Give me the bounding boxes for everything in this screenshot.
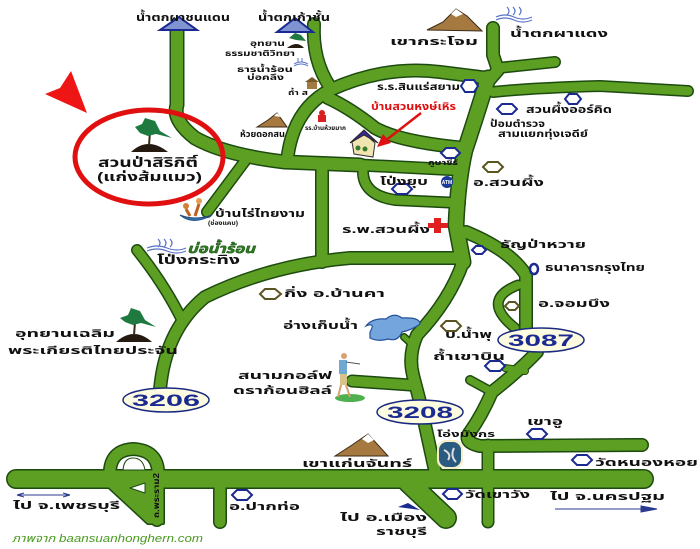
direction arrow Ratchaburi [398, 503, 420, 510]
bank marker [530, 264, 538, 274]
direction arrow Nakhon Pathom [555, 506, 657, 512]
place labels: สนามกอล์ฟ [238, 370, 332, 382]
ATM marker: ATM [442, 180, 452, 186]
place labels: ป้อมตำรวจ [490, 118, 545, 130]
place labels: บ้านไร่ไทยงาม [215, 207, 305, 220]
icon: waves hot spring [294, 58, 308, 66]
place labels: ดราก้อนฮิลล์ [233, 384, 332, 397]
place labels: ภูษาชีร์ [428, 159, 459, 167]
place labels: อุทยาน [250, 39, 285, 48]
route badge 3208: 3208 [387, 403, 453, 422]
place labels: ธนาคารกรุงไทย [545, 262, 645, 274]
icon: house [350, 130, 378, 157]
place labels: ราชบุรี [376, 526, 428, 538]
icon: waves north [496, 7, 532, 22]
place labels: บ้านสวนหงษ์เหิร [371, 100, 456, 113]
olive hexagon markers [260, 162, 519, 331]
route badge 3206: 3206 [132, 391, 200, 410]
place labels: น้ำตกผาแดง [510, 25, 608, 40]
icon: hospital cross [428, 218, 448, 233]
place labels: บ.น้ำพุ [445, 326, 492, 341]
place labels: อุทยานเฉลิม [15, 328, 115, 340]
place labels: เขาแก่นจันทร์ [302, 457, 413, 470]
place labels: รร.บ้านห้วยมาก [305, 125, 346, 132]
icon: shrine [305, 77, 319, 89]
route badge 3208 [377, 400, 463, 424]
icon: mountain west [257, 113, 287, 127]
place labels: น้ำตกผาชนแดน [136, 9, 230, 24]
place labels: โอ่งมังกร [437, 428, 496, 439]
icon: tree [131, 118, 172, 152]
place labels: ไป จ.เพชรบุรี [13, 500, 121, 512]
place labels: ถ้ำเขาบิน [433, 348, 505, 363]
place labels: (ช่องแคบ) [208, 219, 238, 227]
place labels: น้ำตกเก้าชั้น [258, 9, 330, 24]
place labels: สวนผึ้งออร์คิด [526, 101, 612, 116]
icon: mountain north [427, 9, 482, 31]
icon: tree lower [116, 308, 156, 342]
icon: boat rafting [180, 198, 212, 220]
place labels: ธัญป่าหวาย [500, 238, 586, 251]
place labels: ธารน้ำร้อน [237, 63, 293, 74]
place labels: ไป อ.เมือง [340, 512, 427, 524]
place labels: (แก่งส้มแมว) [97, 170, 202, 184]
place labels: บ่อคลึง [247, 71, 285, 82]
ATM marker [441, 176, 453, 188]
icon: mountain south [335, 434, 388, 456]
place labels: ถ้ำ ส [288, 87, 308, 97]
place labels: ร.พ.สวนผึ้ง [342, 221, 430, 236]
place labels: สามแยกทุ่งเจดีย์ [498, 127, 588, 140]
image credit: ภาพจาก baansuanhonghern.com [12, 533, 203, 545]
direction arrow Phetchaburi [17, 493, 70, 497]
place labels: พระเกียรติไทยประจัน [8, 345, 178, 357]
place labels: โป่งยุบ [380, 175, 428, 188]
place labels: ธรรมชาติวิทยา [225, 49, 295, 58]
place labels: ร.ร.สินแร่สยาม [377, 80, 460, 93]
place labels: บ่อน้ำร้อน [187, 239, 257, 256]
hexagon markers [232, 80, 592, 500]
place labels: สวนป่าสิริกิติ์ [98, 154, 199, 170]
icon: waterfall triangle 1 [160, 17, 197, 30]
place labels: อ่างเก็บน้ำ [283, 317, 358, 332]
icon: ceramic jar [437, 440, 463, 469]
place labels: อ.ปากท่อ [229, 500, 301, 513]
route badge 3206 [123, 388, 209, 412]
red ellipse highlight [75, 110, 223, 204]
icon: small tree [287, 33, 306, 48]
place labels: กิ่ง อ.บ้านคา [284, 286, 385, 300]
place labels: เขากระโจม [390, 36, 478, 48]
place labels: วัดเขาวัง [465, 489, 530, 501]
place labels: วัดหนองหอย [595, 457, 698, 469]
road label Rama 2: ถ.พระราม2 [152, 472, 161, 518]
route badge 3087 [498, 328, 584, 352]
place labels: โป่งกระทิง [157, 253, 240, 267]
place labels: อ.สวนผึ้ง [473, 174, 544, 189]
place labels: ไป จ.นครปฐม [550, 491, 665, 503]
route badge 3087: 3087 [508, 331, 574, 350]
icon: school figure [318, 110, 326, 122]
place labels: อ.จอมบึง [538, 298, 610, 310]
icon: waves west [147, 239, 186, 253]
place labels: เขาอู [527, 416, 564, 428]
icon: lake [366, 315, 420, 340]
icon: waterfall triangle 2 [277, 18, 313, 32]
icon: golfer [335, 353, 365, 402]
red arrow to house [377, 113, 421, 147]
place labels: ห้วยดอกสน [240, 129, 285, 139]
red pointer arrow [45, 71, 87, 113]
